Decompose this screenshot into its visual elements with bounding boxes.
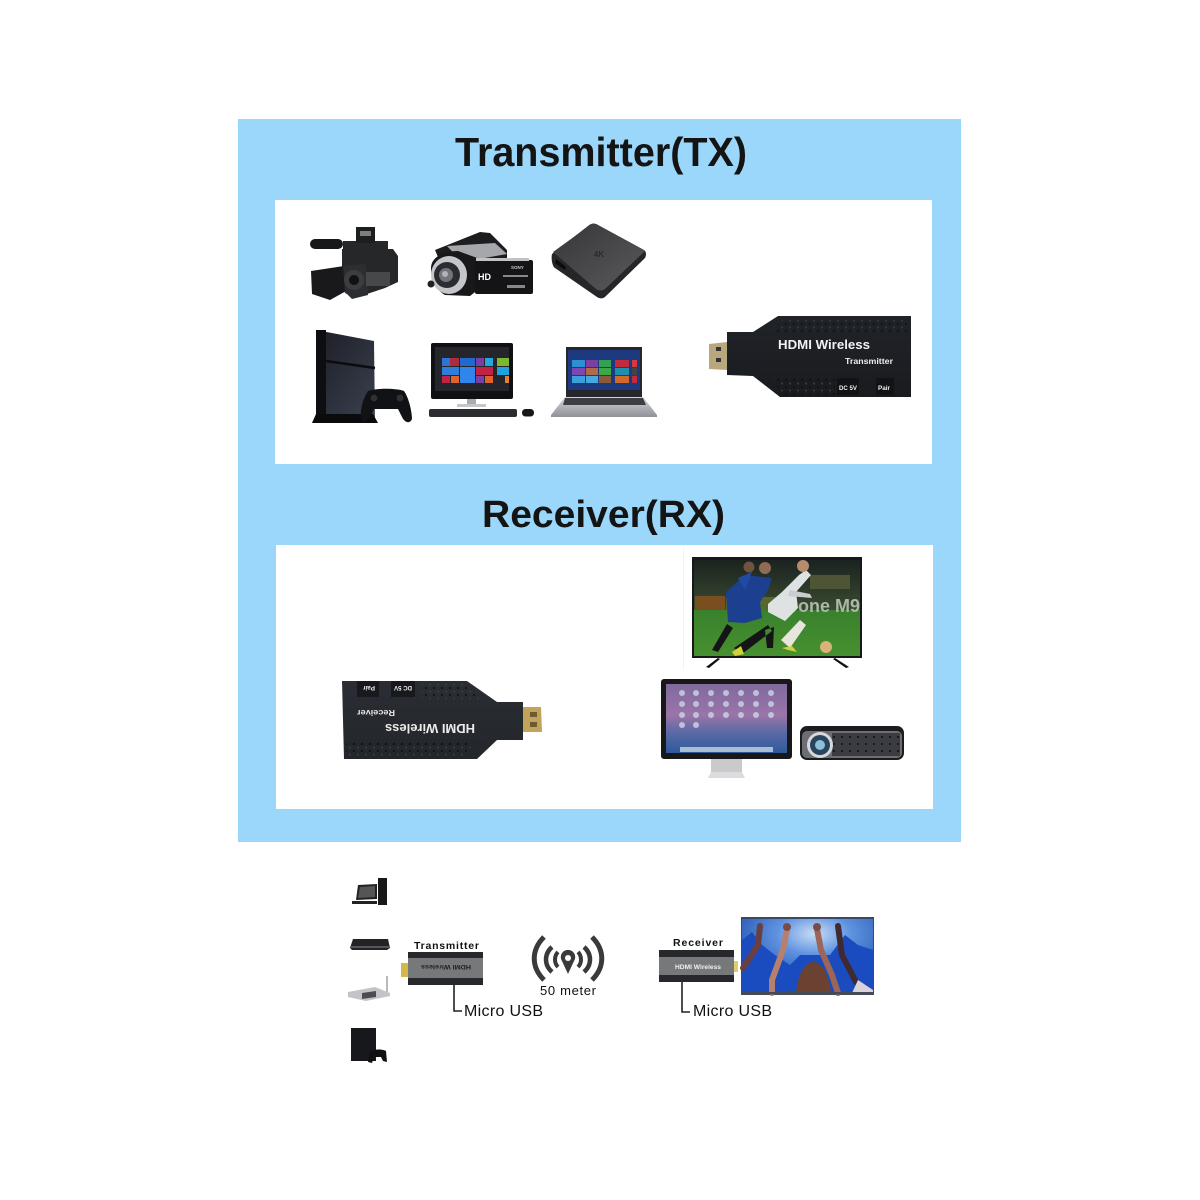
product: HDMI Wireless Transmitter dongle: Transmitter — [845, 356, 894, 366]
icon: desktop computer — [352, 878, 387, 905]
product: HDMI Wireless Receiver dongle: Receiver — [356, 708, 395, 718]
icon: handheld camcorder — [428, 232, 533, 296]
heading: Transmitter(TX): Transmitter(TX) — [455, 129, 747, 175]
product: HDMI Wireless Receiver dongle: DC 5V — [394, 684, 412, 690]
icon: television with football match: one M9 — [798, 596, 860, 616]
icon: bottom receiver dongle — [659, 950, 738, 982]
icon: game console with controller — [312, 330, 412, 423]
panel: transmitter sources — [275, 200, 932, 464]
icon: bottom receiver dongle: HDMI Wireless — [675, 964, 721, 971]
icon: professional video camera — [310, 227, 398, 300]
product: HDMI Wireless Transmitter dongle: DC 5V — [839, 386, 857, 392]
label: 50 meter: 50 meter — [540, 983, 597, 998]
icon: 4K media box — [552, 224, 646, 298]
icon: laptop — [551, 347, 657, 417]
icon: desktop monitor with keyboard and mouse — [429, 343, 534, 417]
panel: receiver displays — [276, 545, 933, 809]
product: HDMI Wireless Receiver dongle: Pair — [362, 684, 375, 690]
connector: transmitter micro USB line — [454, 985, 462, 1011]
product: HDMI Wireless Transmitter dongle: Pair — [878, 386, 891, 392]
icon: bottom transmitter dongle — [401, 952, 483, 985]
icon: wireless signal — [534, 937, 602, 980]
panel: blue background — [238, 119, 961, 842]
icon: game console — [351, 1028, 387, 1063]
icon: 4K media box: 4K — [594, 250, 604, 259]
label: Receiver: Receiver — [673, 937, 723, 949]
label: transmitter Micro USB: Micro USB — [464, 1003, 543, 1020]
label: receiver Micro USB: Micro USB — [693, 1003, 772, 1020]
product: HDMI Wireless Receiver dongle: HDMI Wireless — [385, 721, 475, 735]
icon: television with football match — [692, 557, 862, 668]
icon: bottom transmitter dongle: HDMI Wireless — [421, 963, 471, 970]
photo: concert crowd on display — [741, 917, 874, 995]
heading: Receiver(RX): Receiver(RX) — [482, 494, 725, 536]
icon: handheld camcorder: HD — [478, 272, 491, 282]
product: HDMI Wireless Transmitter dongle: HDMI Wireless — [778, 338, 870, 352]
connector: receiver micro USB line — [682, 982, 690, 1012]
icon: handheld camcorder: SONY — [511, 265, 524, 270]
product: HDMI Wireless Receiver dongle — [342, 681, 542, 759]
product: HDMI Wireless Transmitter dongle — [709, 316, 911, 397]
icon: computer monitor — [661, 679, 792, 778]
icon: media player — [350, 939, 390, 950]
label: Transmitter: Transmitter — [414, 940, 479, 952]
icon: router — [348, 976, 390, 1001]
icon: projector — [800, 726, 904, 760]
